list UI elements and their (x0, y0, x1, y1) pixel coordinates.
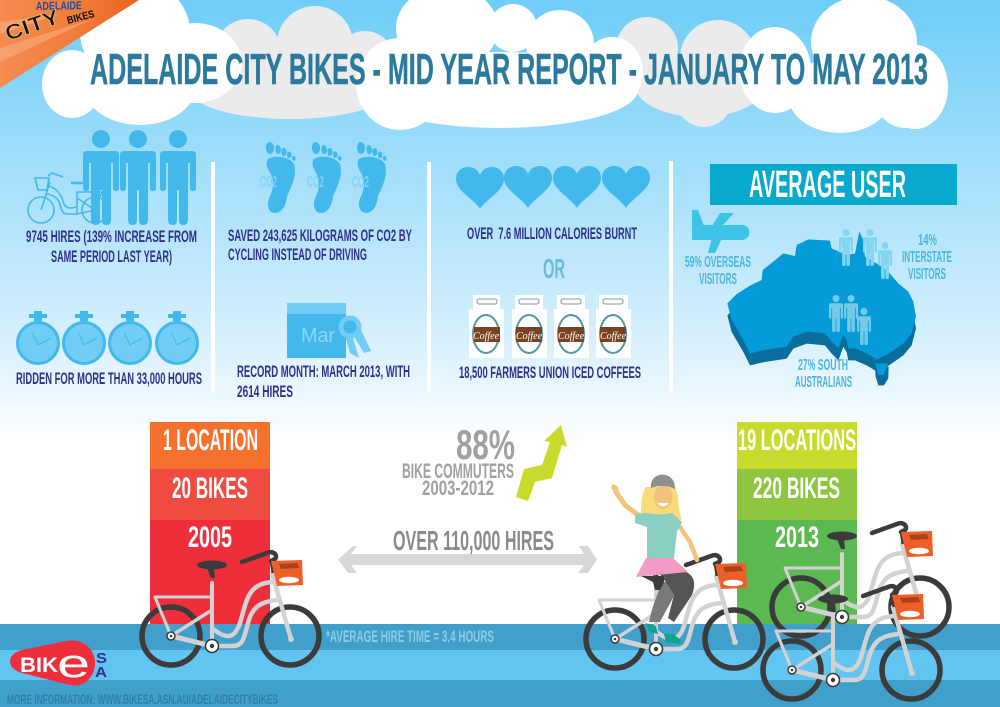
text: or: OR (543, 253, 565, 284)
icon: interstate people (839, 229, 892, 279)
text: CO2 saved: CYCLING INSTEAD OF DRIVING (228, 245, 367, 264)
bicycle: 2005 (142, 552, 319, 665)
icon: iced coffee cartons: Coffee (473, 331, 500, 342)
logo: Bike SA: BIK (20, 654, 58, 677)
panel: 2013 column (737, 422, 857, 624)
logo: Bike SA: e (57, 642, 90, 686)
dividers (211, 162, 215, 392)
logo: Bike SA (10, 641, 107, 686)
icon: CO2 footprints (260, 142, 387, 213)
icon: iced coffee cartons: Coffee (516, 331, 543, 342)
icon: calendar with rosette: Mar (301, 325, 335, 347)
text: south australians (795, 357, 852, 391)
text: overseas visitors: 59% OVERSEAS (685, 254, 751, 271)
icon: bicycle outline (28, 173, 108, 223)
text: overseas visitors: VISITORS (699, 271, 737, 288)
logo banner: Adelaide City Bikes: BIKES (66, 8, 96, 27)
text: overseas visitors (685, 254, 751, 288)
text: interstate visitors: VISITORS (908, 266, 946, 283)
icon: plane (692, 210, 749, 253)
bicycle: upper right (772, 523, 949, 636)
text: hours ridden: RIDDEN FOR MORE THAN 33,000 HOURS (16, 369, 202, 388)
stat: bike commuters: BIKE COMMUTERS (402, 460, 514, 483)
white clouds (42, 0, 948, 133)
text: calories: OVER 7.6 MILLION CALORIES BURNT (467, 224, 637, 243)
icon: CO2 footprints: CO2 (352, 174, 369, 191)
text: record month (237, 362, 410, 401)
logo banner: Adelaide City Bikes (0, 0, 139, 88)
bicycle: lower right (763, 586, 940, 699)
ground stripes (0, 624, 1000, 650)
text: CO2 saved (228, 226, 412, 264)
icon: iced coffee cartons: Coffee (600, 331, 627, 342)
icon: three people (83, 130, 196, 225)
panel: 2013 column: 220 BIKES (753, 472, 840, 505)
icon: iced coffee cartons (469, 295, 631, 358)
panel: 2013 column: 19 LOCATIONS (738, 424, 856, 457)
icon: iced coffee cartons: Coffee (558, 331, 585, 342)
text: interstate visitors: 14% (918, 232, 937, 249)
stat: bike commuters: 88% (456, 421, 515, 468)
panel: 2013 column: 2013 (775, 521, 819, 554)
logo banner: Adelaide City Bikes: ADELAIDE (36, 0, 82, 13)
icon: south australian people (829, 295, 871, 345)
text: south australians: 27% SOUTH (798, 357, 848, 374)
text: over 110,000 hires: OVER 110,000 HIRES (393, 525, 554, 556)
arrow: growth (516, 425, 567, 501)
text: record month: 2614 HIRES (237, 382, 293, 401)
panel: 2005 column: 1 LOCATION (163, 424, 258, 457)
panel: 2005 column: 20 BIKES (172, 472, 248, 505)
text: interstate visitors: INTERSTATE (902, 249, 952, 266)
text: interstate visitors (902, 232, 952, 283)
text: hires (26, 227, 197, 266)
arrow: double headed (338, 546, 597, 573)
figure: waving rider (611, 475, 697, 644)
icon: CO2 footprints: CO2 (307, 174, 324, 191)
text: south australians: AUSTRALIANS (795, 374, 852, 391)
text: record month: RECORD MONTH: MARCH 2013, WITH (237, 362, 410, 381)
icon: CO2 footprints: CO2 (260, 174, 277, 191)
text: more information: MORE INFORMATION: WWW.BIKESA.ASN.AU/ADELAIDECITYBIKES (7, 691, 278, 707)
map: Australia (727, 232, 916, 385)
stat: bike commuters (402, 421, 515, 500)
panel: 2005 column: 2005 (188, 521, 232, 554)
stat: bike commuters: 2003-2012 (422, 477, 494, 500)
logo: Bike SA: S (96, 650, 107, 667)
panel: 2005 column (150, 422, 270, 624)
sky background (0, 0, 1000, 445)
text: hires: SAME PERIOD LAST YEAR) (51, 247, 172, 266)
text: iced coffees: 18,500 FARMERS UNION ICED COFFEES (459, 363, 641, 382)
logo: Bike SA: A (95, 664, 107, 681)
icon: stopwatches (18, 311, 198, 364)
note: average hire time: *AVERAGE HIRE TIME = 3.4 HOURS (326, 627, 494, 646)
bicycle: rider bike (586, 555, 763, 668)
icon: calendar with rosette (287, 303, 371, 358)
grey clouds (190, 6, 765, 127)
text: hires: 9745 HIRES (139% INCREASE FROM (26, 227, 197, 246)
text: CO2 saved: SAVED 243,625 KILOGRAMS OF CO2 BY (228, 226, 412, 245)
icon: hearts (456, 166, 650, 209)
logo banner: Adelaide City Bikes: CITY (2, 6, 63, 46)
